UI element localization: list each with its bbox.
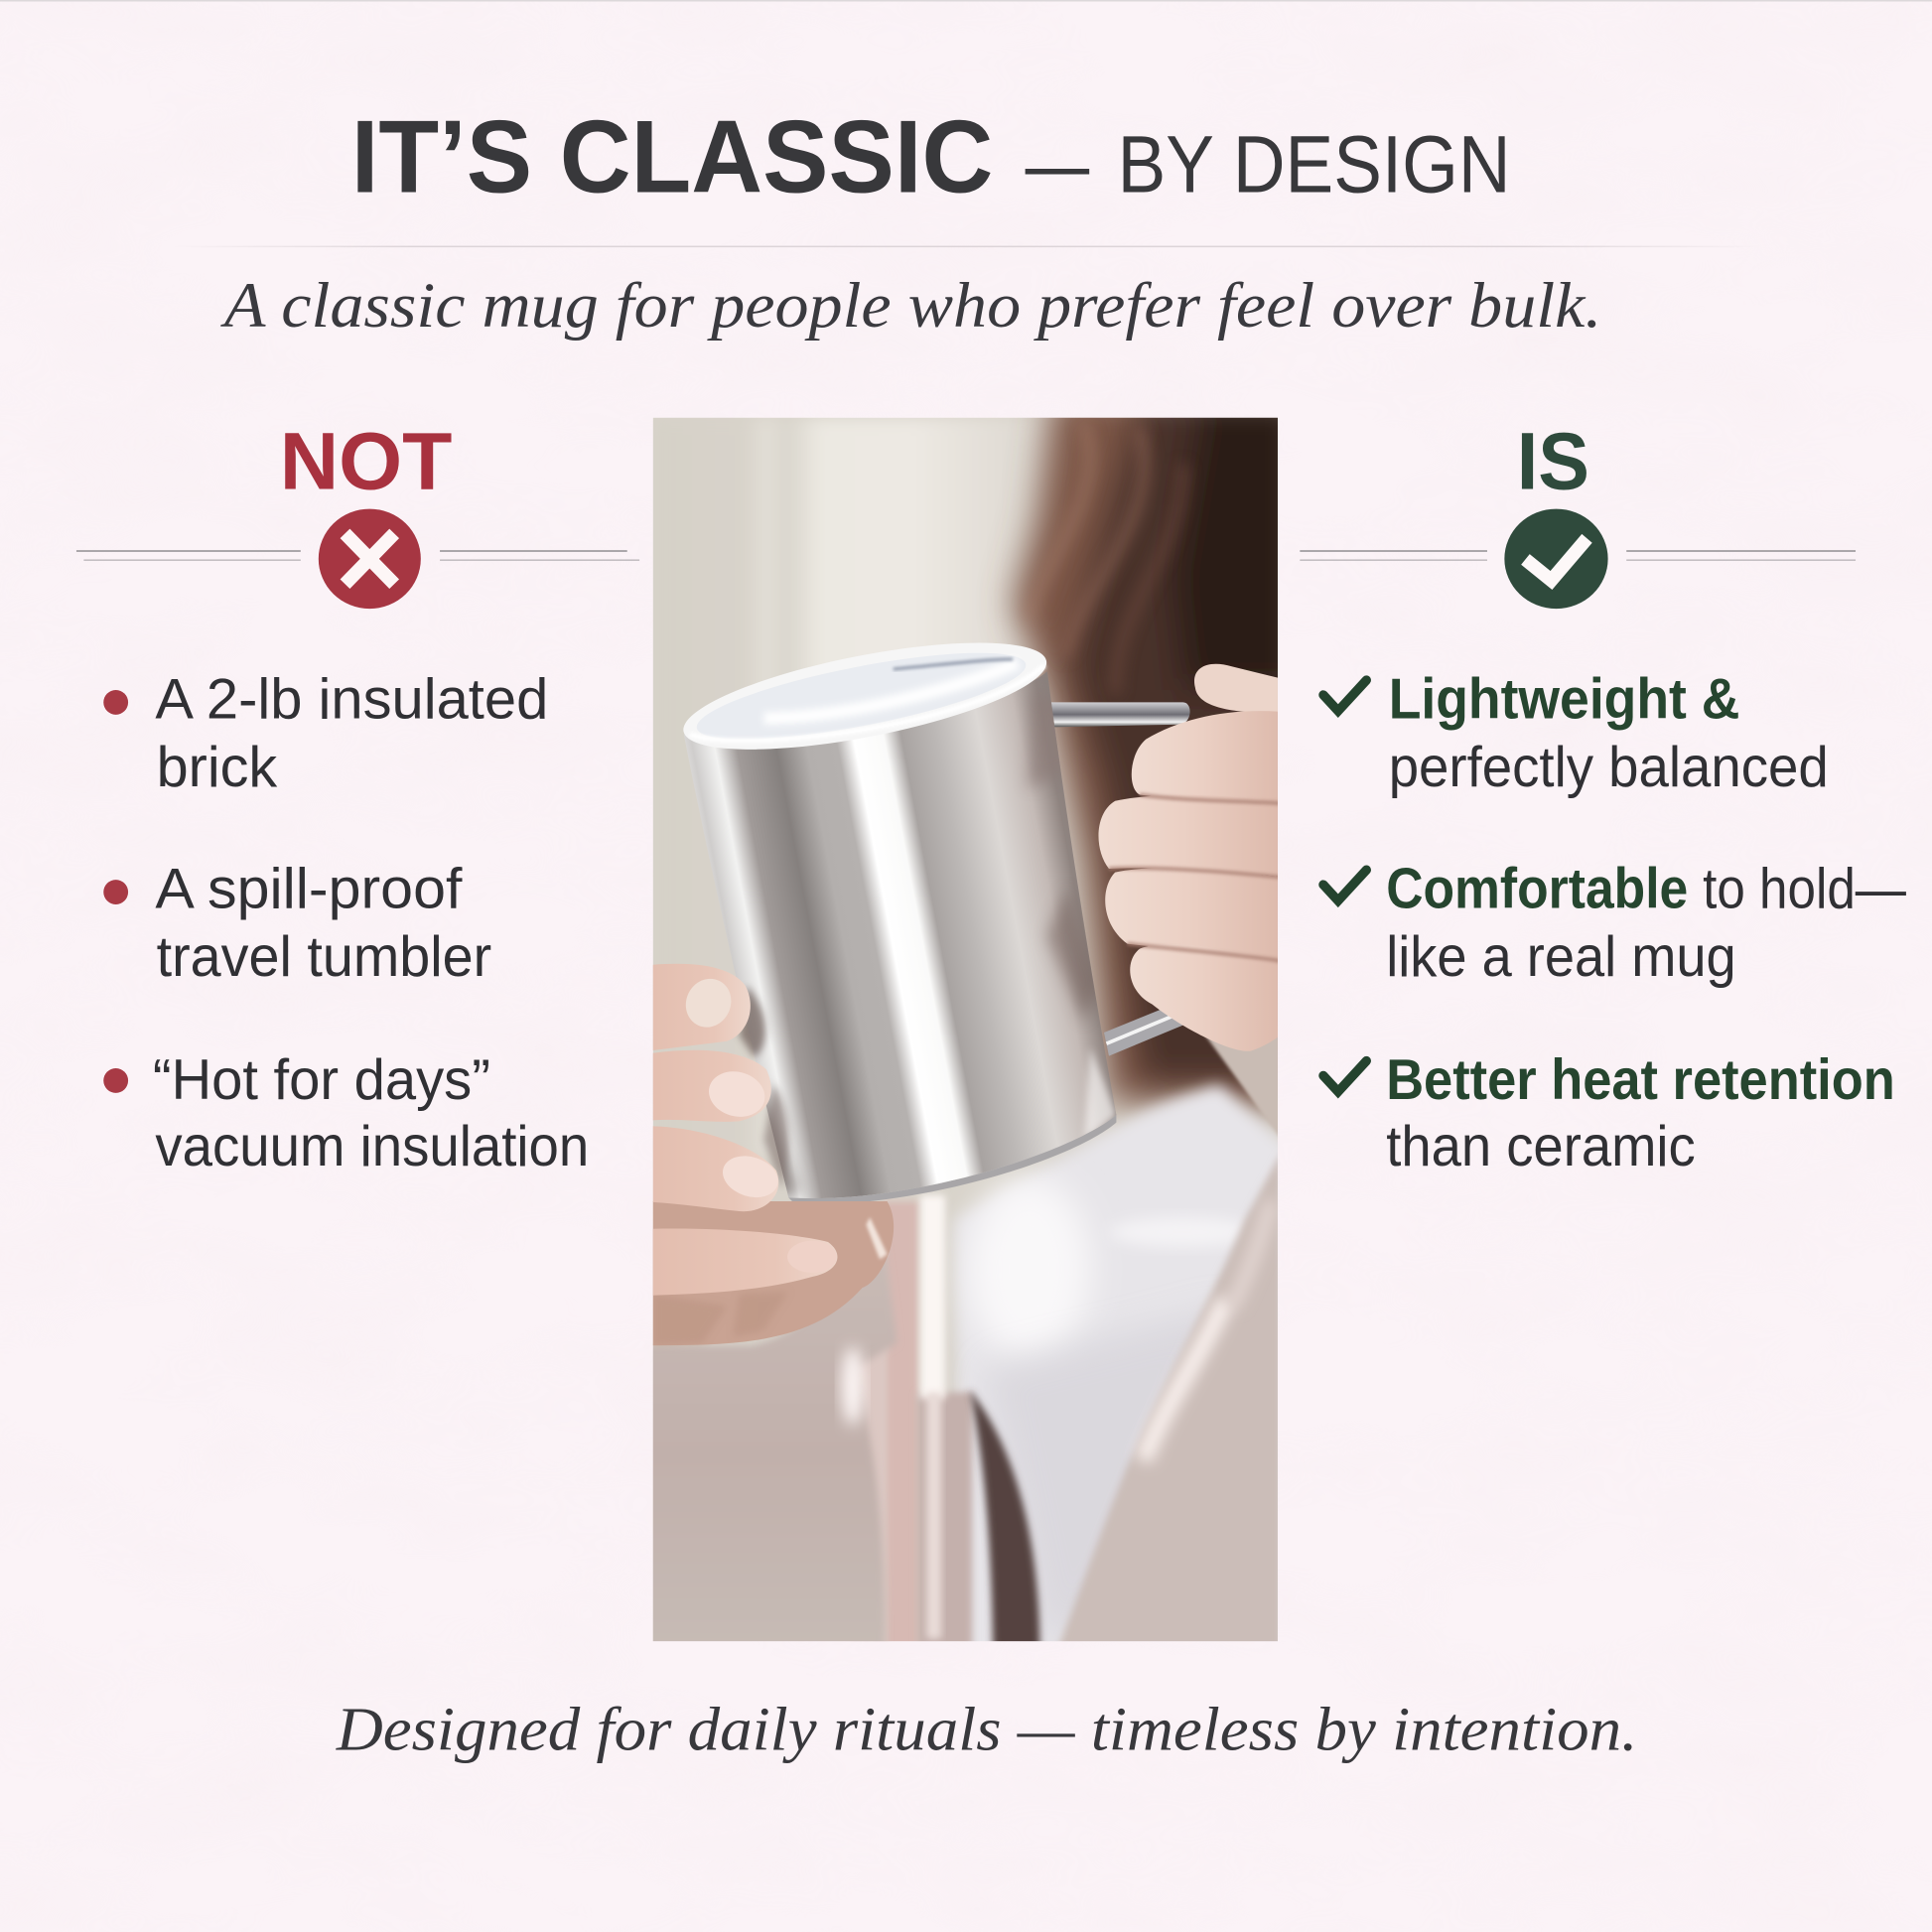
title: IT’S CLASSIC	[351, 100, 993, 215]
panel: NOT column	[76, 417, 639, 1178]
panel: IS column	[1300, 417, 1907, 1178]
item: comfortable: Comfortable	[1386, 858, 1688, 921]
item: heat retention: Better heat retention	[1386, 1048, 1895, 1112]
scarf	[885, 1199, 919, 1642]
table	[955, 1084, 1307, 1663]
item: vacuum insulation: “Hot for days”	[153, 1048, 490, 1112]
right sweater	[1057, 1152, 1282, 1651]
heading: IS: IS	[1517, 417, 1589, 507]
footer tagline: Designed for daily rituals — timeless by intention.	[336, 1696, 1637, 1763]
heading: NOT: NOT	[280, 417, 452, 507]
left hand	[628, 964, 894, 1345]
left sweater	[653, 1261, 897, 1642]
item: vacuum insulation: vacuum insulation	[155, 1115, 589, 1178]
item: travel tumbler: travel tumbler	[157, 925, 491, 989]
icon: green check badge	[1504, 509, 1608, 609]
title: BY DESIGN	[1118, 120, 1511, 210]
list: what it is not	[103, 668, 589, 1178]
item: 2-lb brick: brick	[157, 736, 278, 799]
item: travel tumbler	[103, 858, 491, 989]
item: 2-lb brick	[103, 668, 548, 799]
item: lightweight	[1323, 668, 1829, 799]
photo: hands holding a steel mug	[653, 417, 1278, 1642]
title	[351, 100, 1511, 215]
subtitle: A classic mug for people who prefer feel over bulk.	[220, 269, 1601, 341]
title: —	[1026, 120, 1089, 210]
mug body	[676, 621, 1116, 1204]
item: comfortable: to hold—	[1703, 858, 1907, 921]
item: comfortable	[1323, 858, 1907, 989]
item: 2-lb brick: A 2-lb insulated	[155, 668, 548, 732]
item: comfortable: like a real mug	[1386, 925, 1736, 989]
hair	[1013, 394, 1307, 1109]
item: heat retention	[1323, 1048, 1895, 1178]
item: lightweight: perfectly balanced	[1389, 736, 1829, 799]
item: vacuum insulation	[103, 1048, 589, 1178]
item: lightweight: Lightweight &	[1389, 668, 1739, 732]
list: what it is	[1323, 668, 1907, 1178]
item: travel tumbler: A spill-proof	[155, 858, 463, 921]
right hand	[1098, 664, 1288, 1051]
icon: red cross badge	[319, 509, 421, 609]
sleeve, right hand	[1203, 1036, 1278, 1136]
item: heat retention: than ceramic	[1386, 1115, 1696, 1178]
handle	[1049, 702, 1190, 1056]
shadow fold	[970, 1390, 1040, 1663]
